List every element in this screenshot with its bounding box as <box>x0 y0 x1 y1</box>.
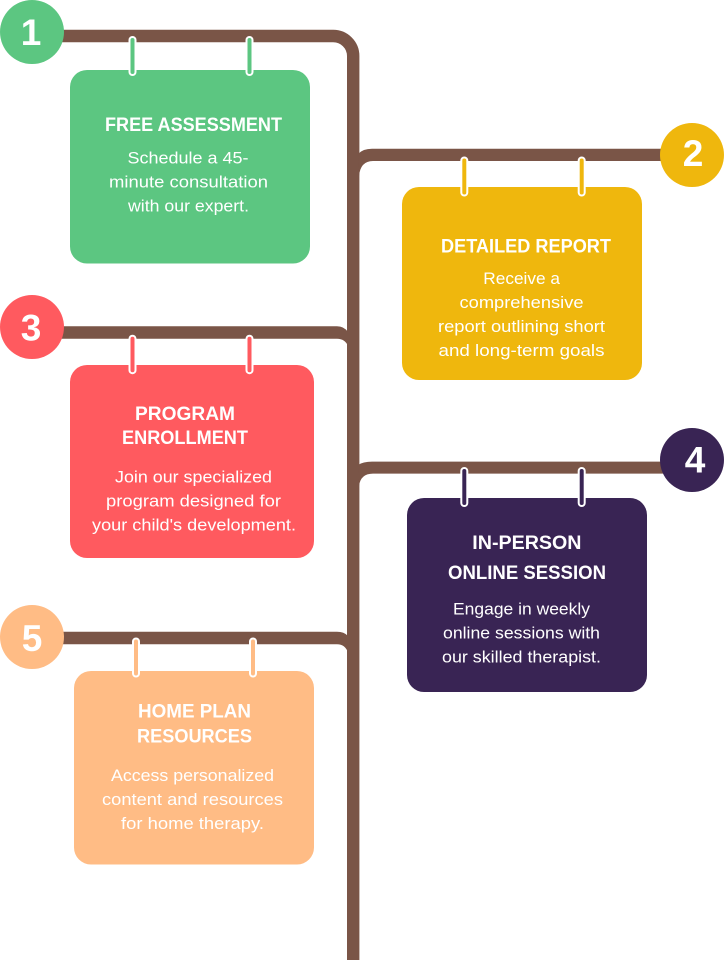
step 1 heading: FREE ASSESSMENT <box>105 115 282 136</box>
step 1 card <box>70 70 310 264</box>
step 2 hangers <box>461 158 585 196</box>
arm to step 2 <box>358 149 665 176</box>
step 2 <box>402 123 724 380</box>
step 5 number badge <box>0 605 64 669</box>
step 5 <box>0 605 314 864</box>
step 3 card <box>70 365 314 558</box>
step 1 number badge: 1 <box>21 12 41 53</box>
step 5 heading <box>137 702 252 748</box>
step 5 description: for home therapy. <box>121 815 264 833</box>
step 4 number badge <box>660 428 724 492</box>
step 4 heading <box>448 533 606 584</box>
step 3 hangers <box>130 336 252 373</box>
arm to step 5 <box>60 632 348 652</box>
step 4 description: our skilled therapist. <box>442 648 601 666</box>
step 4 heading: IN-PERSON <box>472 533 582 554</box>
step 2 description: and long-term goals <box>438 342 604 360</box>
step 3 heading: PROGRAM <box>135 404 235 425</box>
step 5 heading: HOME PLAN <box>138 702 251 723</box>
step 2 description: Receive a <box>483 270 561 288</box>
step 5 description <box>102 767 283 833</box>
arm to step 4 <box>358 462 665 486</box>
step 4 number badge: 4 <box>685 440 706 481</box>
step 1 description <box>109 149 268 215</box>
step 3 <box>0 295 314 558</box>
step 5 card <box>74 671 314 864</box>
step 2 description <box>438 270 605 360</box>
step 1 number badge <box>0 0 64 64</box>
step 3 description: Join our specialized <box>115 468 272 486</box>
signpost pole and step 1 arm <box>60 36 353 960</box>
step 5 hangers <box>133 638 256 676</box>
step 4 description: Engage in weekly <box>453 600 591 618</box>
step 5 number badge: 5 <box>22 618 42 659</box>
step 4 <box>407 428 724 692</box>
step 3 number badge: 3 <box>21 308 41 349</box>
step 1 hangers <box>130 37 252 75</box>
step 5 heading: RESOURCES <box>137 727 252 748</box>
arm to step 3 <box>60 326 348 346</box>
step 3 heading: ENROLLMENT <box>122 428 248 449</box>
step 2 description: report outlining short <box>438 318 605 336</box>
step 1 description: minute consultation <box>109 173 268 191</box>
step 3 description: your child's development. <box>92 516 296 534</box>
step 4 description <box>442 600 601 666</box>
step 2 description: comprehensive <box>460 294 584 312</box>
step 3 heading <box>122 404 248 449</box>
step 4 hangers <box>461 468 585 506</box>
step 3 number badge <box>0 295 64 359</box>
step 4 description: online sessions with <box>443 624 600 642</box>
step 3 description: program designed for <box>106 492 282 510</box>
step 2 number badge <box>660 123 724 187</box>
step 2 card <box>402 187 642 380</box>
step 5 description: content and resources <box>102 791 283 809</box>
step 3 description <box>92 468 296 534</box>
step 1 <box>0 0 310 264</box>
step 1 description: with our expert. <box>127 197 249 215</box>
step 5 description: Access personalized <box>111 767 274 785</box>
step 4 heading: ONLINE SESSION <box>448 563 606 584</box>
step 4 card <box>407 498 647 692</box>
step 1 description: Schedule a 45- <box>128 149 248 167</box>
step 2 heading: DETAILED REPORT <box>441 236 611 257</box>
step 2 number badge: 2 <box>683 133 703 174</box>
